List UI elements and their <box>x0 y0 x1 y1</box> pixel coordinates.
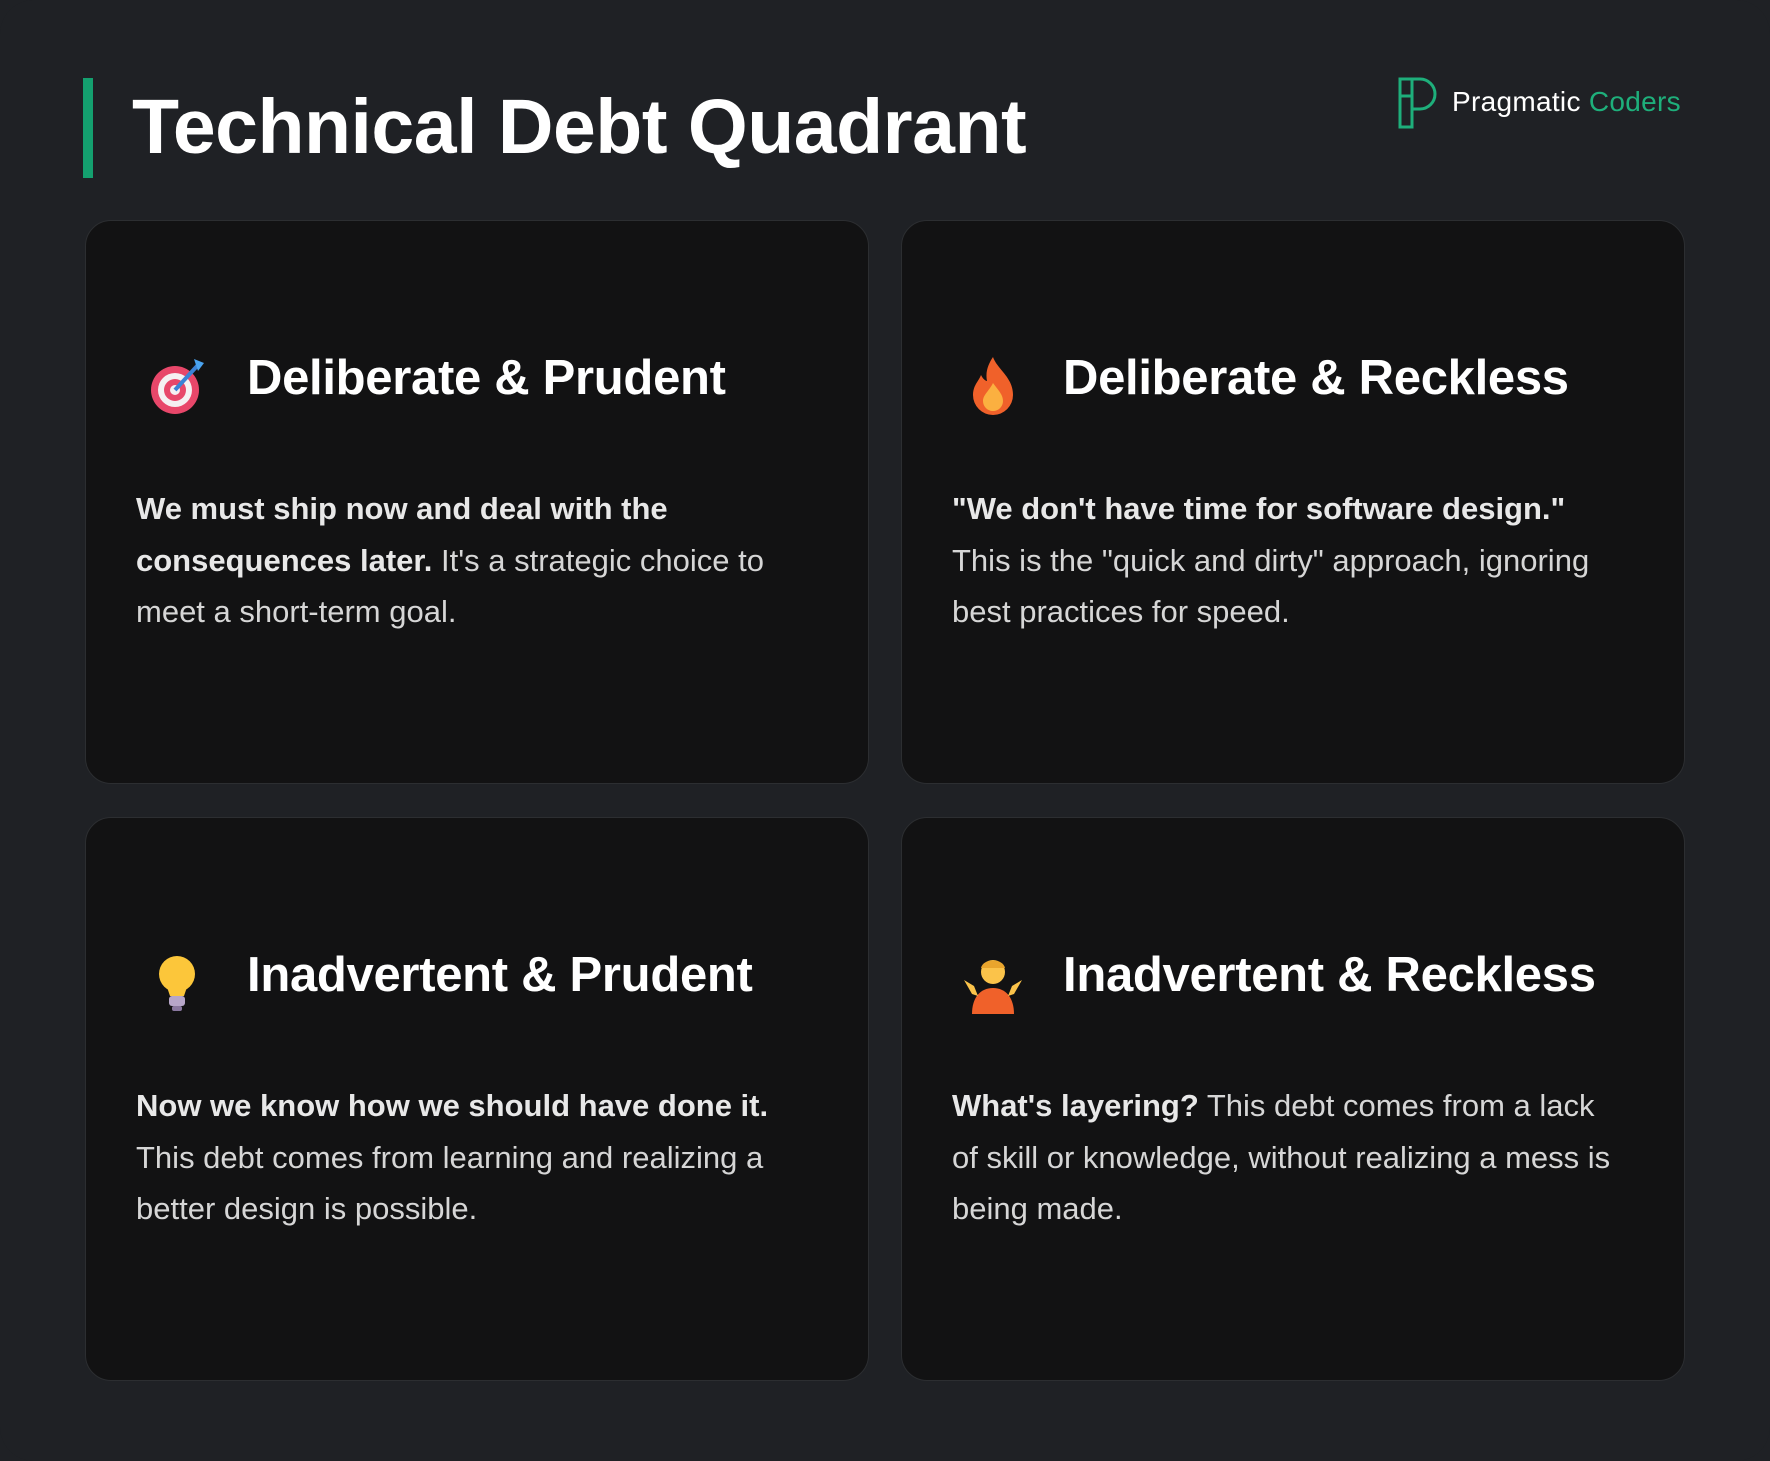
panel: inadvertent prudent <box>85 817 869 1381</box>
panel: deliberate reckless <box>901 220 1685 784</box>
icon: shrug <box>964 960 1022 1014</box>
logo: Pragmatic Coders: Pragmatic Coders <box>1452 86 1681 117</box>
icon: fire <box>973 357 1013 415</box>
panel: inadvertent reckless <box>901 817 1685 1381</box>
text: What's layering? This debt comes from a lack of skill or knowledge, without realizing a mess is being made. <box>952 1088 1610 1226</box>
icon: target <box>151 359 204 414</box>
heading: Deliberate & Reckless <box>1063 351 1569 405</box>
heading: Inadvertent & Prudent <box>247 948 753 1002</box>
text: We must ship now and deal with the consequences later. It's a strategic choice to meet a short-term goal. <box>136 491 764 629</box>
heading: Inadvertent & Reckless <box>1063 948 1596 1002</box>
panel: deliberate prudent <box>85 220 869 784</box>
text: "We don't have time for software design." This is the "quick and dirty" approach, ignoring best practices for speed. <box>952 491 1589 629</box>
icon: light bulb <box>159 956 195 1011</box>
logo: Pragmatic Coders <box>1398 78 1681 128</box>
title: Technical Debt Quadrant <box>132 84 1026 170</box>
accent bar <box>83 78 93 178</box>
text: Now we know how we should have done it. This debt comes from learning and realizing a better design is possible. <box>136 1088 768 1226</box>
heading: Deliberate & Prudent <box>247 351 726 405</box>
